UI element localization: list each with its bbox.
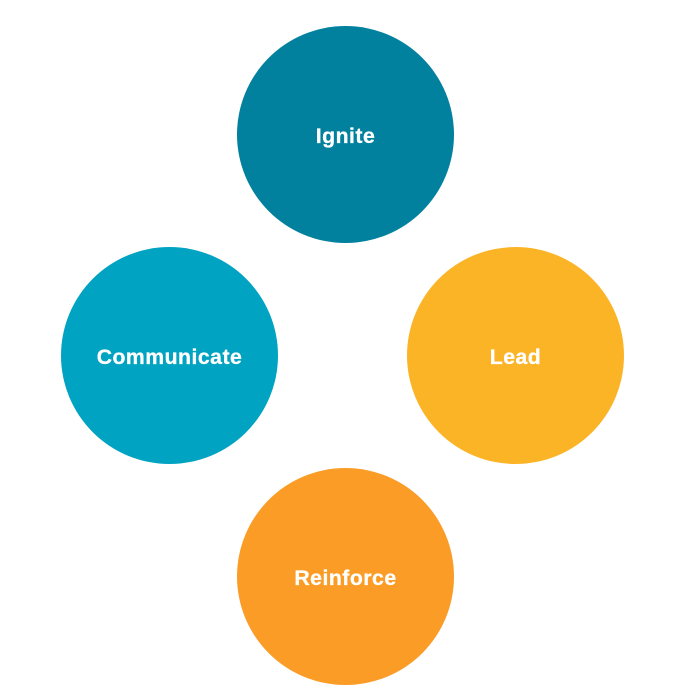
circle: Communicate <box>61 247 278 464</box>
circle: Reinforce: Reinforce <box>294 567 397 590</box>
circle: Communicate: Communicate <box>97 346 242 369</box>
circle: Ignite <box>237 26 454 243</box>
circle: Ignite: Ignite <box>316 125 375 148</box>
circle: Reinforce <box>237 468 454 685</box>
circle: Lead <box>407 247 624 464</box>
circle: Lead: Lead <box>490 346 541 369</box>
